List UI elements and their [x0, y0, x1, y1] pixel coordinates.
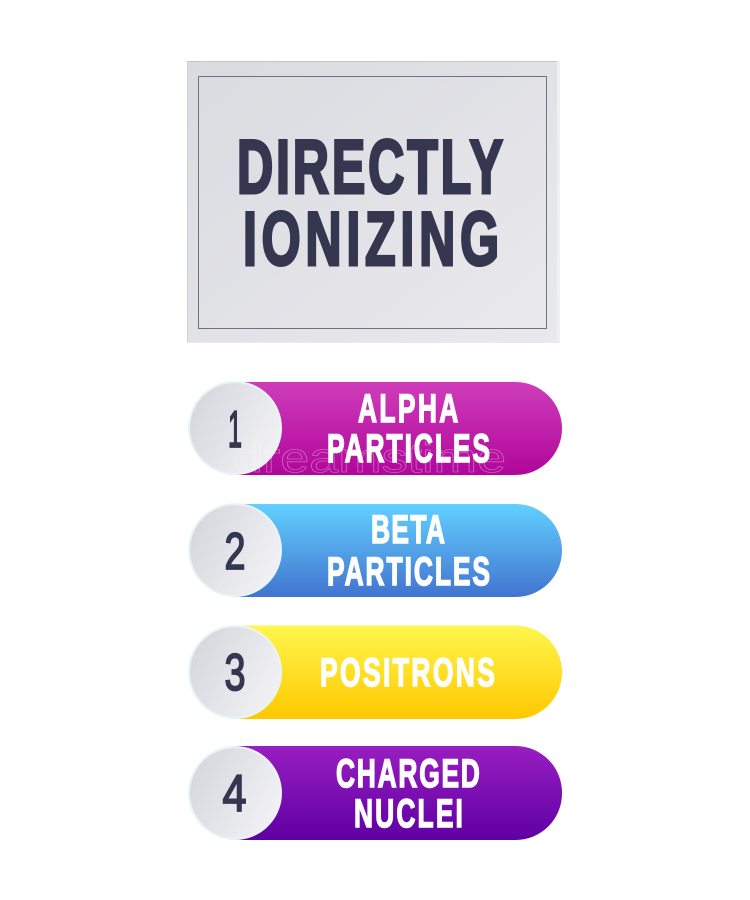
label: positrons: POSITRONS — [320, 651, 495, 695]
number disc 1: 1 — [228, 401, 242, 459]
title: directly ionizing — [237, 125, 503, 282]
number disc 3: 3 — [224, 644, 246, 702]
label: charged nuclei: NUCLEI — [354, 792, 463, 836]
label: alpha particles — [327, 387, 490, 471]
title: directly ionizing: DIRECTLY — [237, 125, 503, 210]
item 2: beta particles — [189, 504, 562, 597]
number disc 3 — [189, 626, 281, 718]
item 1: alpha particles — [189, 382, 562, 475]
number disc 4 — [189, 747, 281, 839]
item 4: charged nuclei — [189, 746, 562, 840]
number disc 2: 2 — [224, 523, 246, 581]
watermark: dreamstime — [234, 434, 506, 481]
label: alpha particles: PARTICLES — [327, 427, 490, 471]
label: beta particles: BETA — [371, 508, 445, 552]
item 3: positrons — [189, 626, 562, 719]
label: charged nuclei — [336, 752, 480, 836]
label: beta particles: PARTICLES — [327, 550, 490, 594]
label: beta particles — [327, 508, 490, 594]
title: directly ionizing: IONIZING — [243, 197, 499, 282]
number disc 2 — [189, 504, 281, 596]
title card — [187, 61, 560, 343]
number disc 1 — [189, 382, 281, 474]
label: alpha particles: ALPHA — [358, 387, 458, 431]
label: charged nuclei: CHARGED — [336, 752, 480, 796]
number disc 4: 4 — [222, 765, 246, 823]
